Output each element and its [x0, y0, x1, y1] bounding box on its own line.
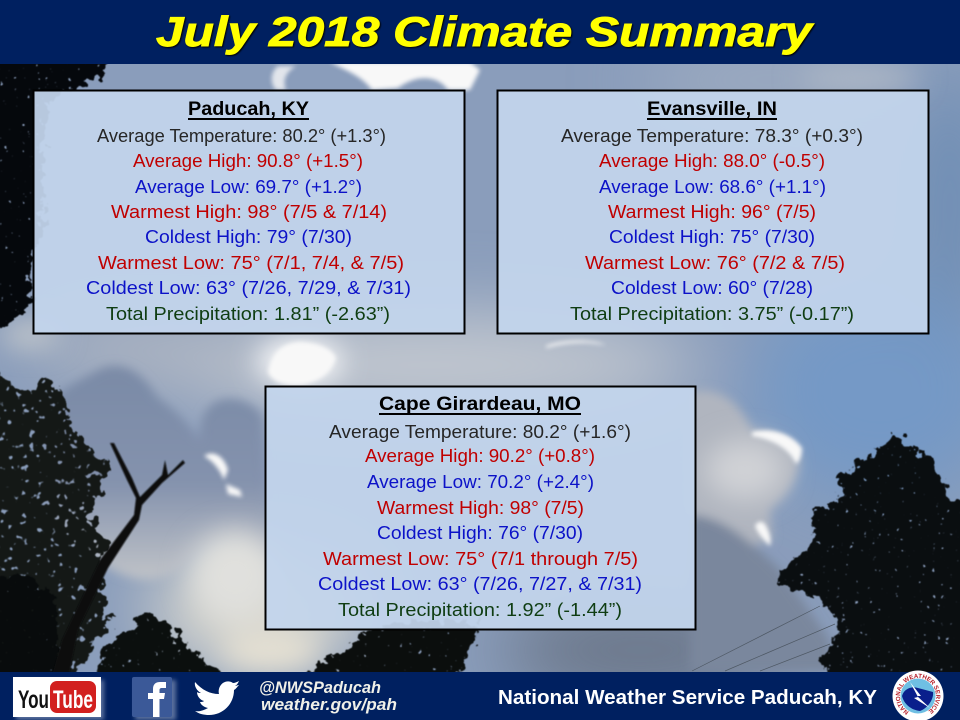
- cloud: left cumulus: [40, 366, 270, 579]
- tree: bottom centre: [298, 620, 478, 690]
- panel: Cape Girardeau, MO: [266, 386, 696, 630]
- title: July 2018 Climate Summary: [156, 8, 815, 55]
- icon: YouTube: [13, 677, 104, 720]
- coldest low: Coldest Low: 63° (7/26, 7/27, & 7/31): [318, 574, 642, 594]
- heading: Paducah: Paducah, KY: [188, 98, 309, 120]
- icon: YouTube: Tube: [53, 686, 93, 714]
- warmest high: Warmest High: 98° (7/5 & 7/14): [111, 202, 387, 222]
- warmest high: Warmest High: 96° (7/5): [608, 202, 816, 222]
- average high: Average High: 88.0° (-0.5°): [599, 151, 825, 171]
- coldest high: Coldest High: 79° (7/30): [145, 227, 352, 247]
- coldest high: Coldest High: 76° (7/30): [377, 523, 583, 543]
- icon: Twitter: [195, 681, 239, 715]
- average low: Average Low: 70.2° (+2.4°): [367, 472, 594, 492]
- warmest high: Warmest High: 98° (7/5): [377, 498, 584, 518]
- footer credit: National Weather Service Paducah, KY: [498, 687, 878, 709]
- website: weather.gov/pah: [261, 695, 397, 714]
- social handle: @NWSPaducah: [259, 678, 381, 697]
- icon: YouTube: You: [18, 686, 49, 714]
- cloud: lit edges: [204, 62, 802, 546]
- heading: Evansville: Evansville, IN: [647, 98, 777, 120]
- warmest low: Warmest Low: 75° (7/1 through 7/5): [323, 549, 638, 569]
- total precipitation: Total Precipitation: 1.92” (-1.44”): [338, 600, 622, 620]
- average temperature: Average Temperature: 78.3° (+0.3°): [561, 126, 863, 146]
- panel: Evansville, IN: [498, 90, 928, 334]
- coldest low: Coldest Low: 60° (7/28): [611, 278, 813, 298]
- footer bar: [0, 670, 960, 720]
- warmest low: Warmest Low: 76° (7/2 & 7/5): [585, 253, 845, 273]
- heading: Cape Girardeau: Cape Girardeau, MO: [379, 393, 581, 415]
- warmest low: Warmest Low: 75° (7/1, 7/4, & 7/5): [98, 253, 404, 273]
- coldest low: Coldest Low: 63° (7/26, 7/29, & 7/31): [86, 278, 411, 298]
- tree: lower centre-left dome: [88, 616, 228, 690]
- icon: NWS logo: NATIONAL WEATHER SERVICE: [896, 674, 940, 715]
- panel: Paducah, KY: [34, 90, 464, 334]
- cloud: right cumulus: [690, 391, 830, 672]
- average temperature: Average Temperature: 80.2° (+1.3°): [97, 126, 386, 146]
- tree: right: [776, 432, 960, 690]
- tree: top left: [0, 40, 122, 340]
- total precipitation: Total Precipitation: 3.75” (-0.17”): [570, 304, 854, 324]
- header banner: [0, 0, 960, 64]
- tree: bare branch: [48, 443, 185, 690]
- average high: Average High: 90.8° (+1.5°): [133, 151, 363, 171]
- coldest high: Coldest High: 75° (7/30): [609, 227, 815, 247]
- average low: Average Low: 68.6° (+1.1°): [599, 177, 826, 197]
- tree: lower left: [0, 345, 110, 690]
- power lines: [692, 606, 835, 671]
- icon: Facebook: [132, 677, 176, 720]
- average temperature: Average Temperature: 80.2° (+1.6°): [329, 422, 631, 442]
- average high: Average High: 90.2° (+0.8°): [365, 446, 595, 466]
- average low: Average Low: 69.7° (+1.2°): [135, 177, 362, 197]
- total precipitation: Total Precipitation: 1.81” (-2.63”): [106, 304, 390, 324]
